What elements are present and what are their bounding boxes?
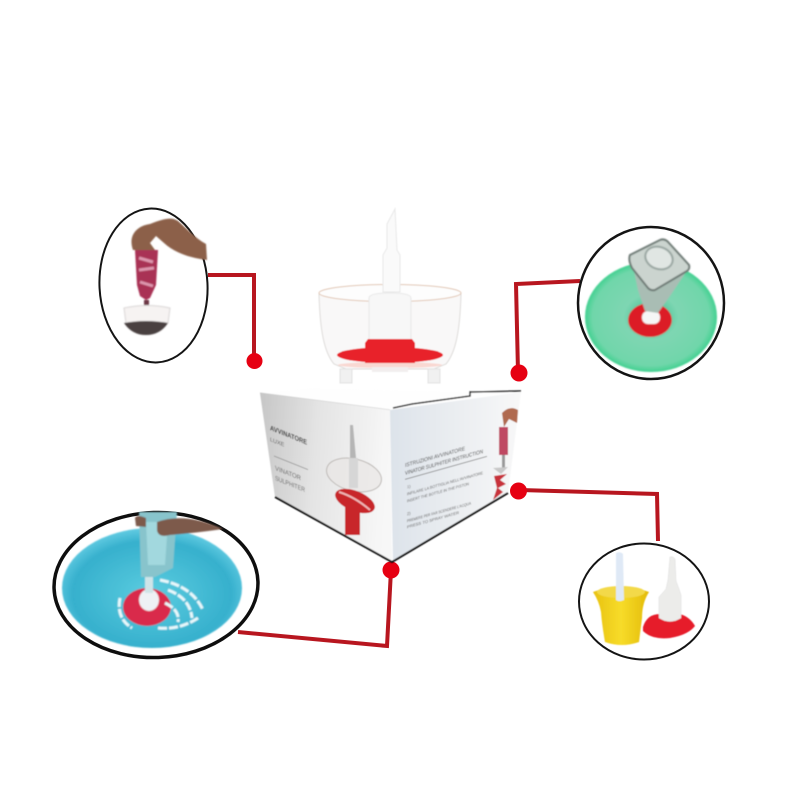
- blue basin: [62, 528, 242, 648]
- yellow cup stem: [616, 552, 624, 601]
- red disc: [123, 588, 171, 626]
- photo: bottle in blue basin: [52, 509, 260, 661]
- red disc: [643, 614, 695, 638]
- photo: bottle on green basin: [578, 227, 724, 379]
- right face instructions: PREMERE PER FAR SCENDERE L'ACQUA: [407, 501, 471, 523]
- white stem: [383, 209, 400, 292]
- left face label: SULPHITER: [275, 475, 305, 494]
- bottle base: [629, 239, 689, 290]
- white spout: [659, 557, 681, 622]
- feet: [340, 369, 352, 383]
- bowl: [319, 294, 461, 369]
- hand: [135, 516, 223, 536]
- right face instructions: ISTRUZIONI AVVINATORE: [405, 446, 465, 469]
- right face instructions: INSERT THE BOTTLE IN THE PISTON: [407, 481, 469, 503]
- right face instructions: 1): [407, 483, 411, 489]
- right face instructions: PRESS TO SPRAY WATER: [407, 510, 459, 529]
- connector: top right photo to dot: [510, 281, 580, 382]
- left face label: [270, 423, 308, 495]
- hand: [132, 219, 207, 260]
- right face instructions: [405, 440, 487, 530]
- photo: pressing bottle with hand: [96, 206, 211, 365]
- right face instructions: 2): [407, 510, 411, 516]
- connector: top left photo to dot: [208, 275, 262, 369]
- product: aerator with bowl: [319, 209, 461, 383]
- right face illustration: [493, 408, 518, 500]
- red base disc: [337, 347, 443, 363]
- photo: yellow and red parts: [579, 544, 709, 660]
- left face label: LUXE: [270, 437, 285, 449]
- green basin: [585, 262, 717, 372]
- bottle: [632, 262, 686, 313]
- bottle: [139, 512, 177, 577]
- left face label: AVVINATORE: [270, 423, 307, 447]
- left face illustration: [323, 425, 385, 535]
- white nozzle: [139, 589, 159, 611]
- right face instructions: VINATOR SULPHITER INSTRUCTION: [405, 449, 483, 477]
- right face instructions: INFILARE LA BOTTIGLIA NELL'AVVINATORE: [407, 470, 483, 496]
- white column: [369, 293, 411, 342]
- yellow cup: [593, 586, 649, 645]
- left face label: VINATOR: [275, 465, 301, 482]
- connector: lower left photo to box dot: [238, 562, 400, 646]
- red collar: [365, 339, 415, 363]
- box flaps: [260, 388, 521, 410]
- right face: [390, 392, 521, 562]
- product box: [260, 388, 521, 562]
- connector: lower right photo to box dot: [510, 482, 658, 541]
- water swirl: [119, 580, 203, 628]
- left face: [260, 393, 392, 562]
- small bowl: [124, 306, 170, 323]
- box edges: [275, 493, 508, 562]
- bottle: [135, 250, 158, 300]
- red disc: [628, 303, 672, 337]
